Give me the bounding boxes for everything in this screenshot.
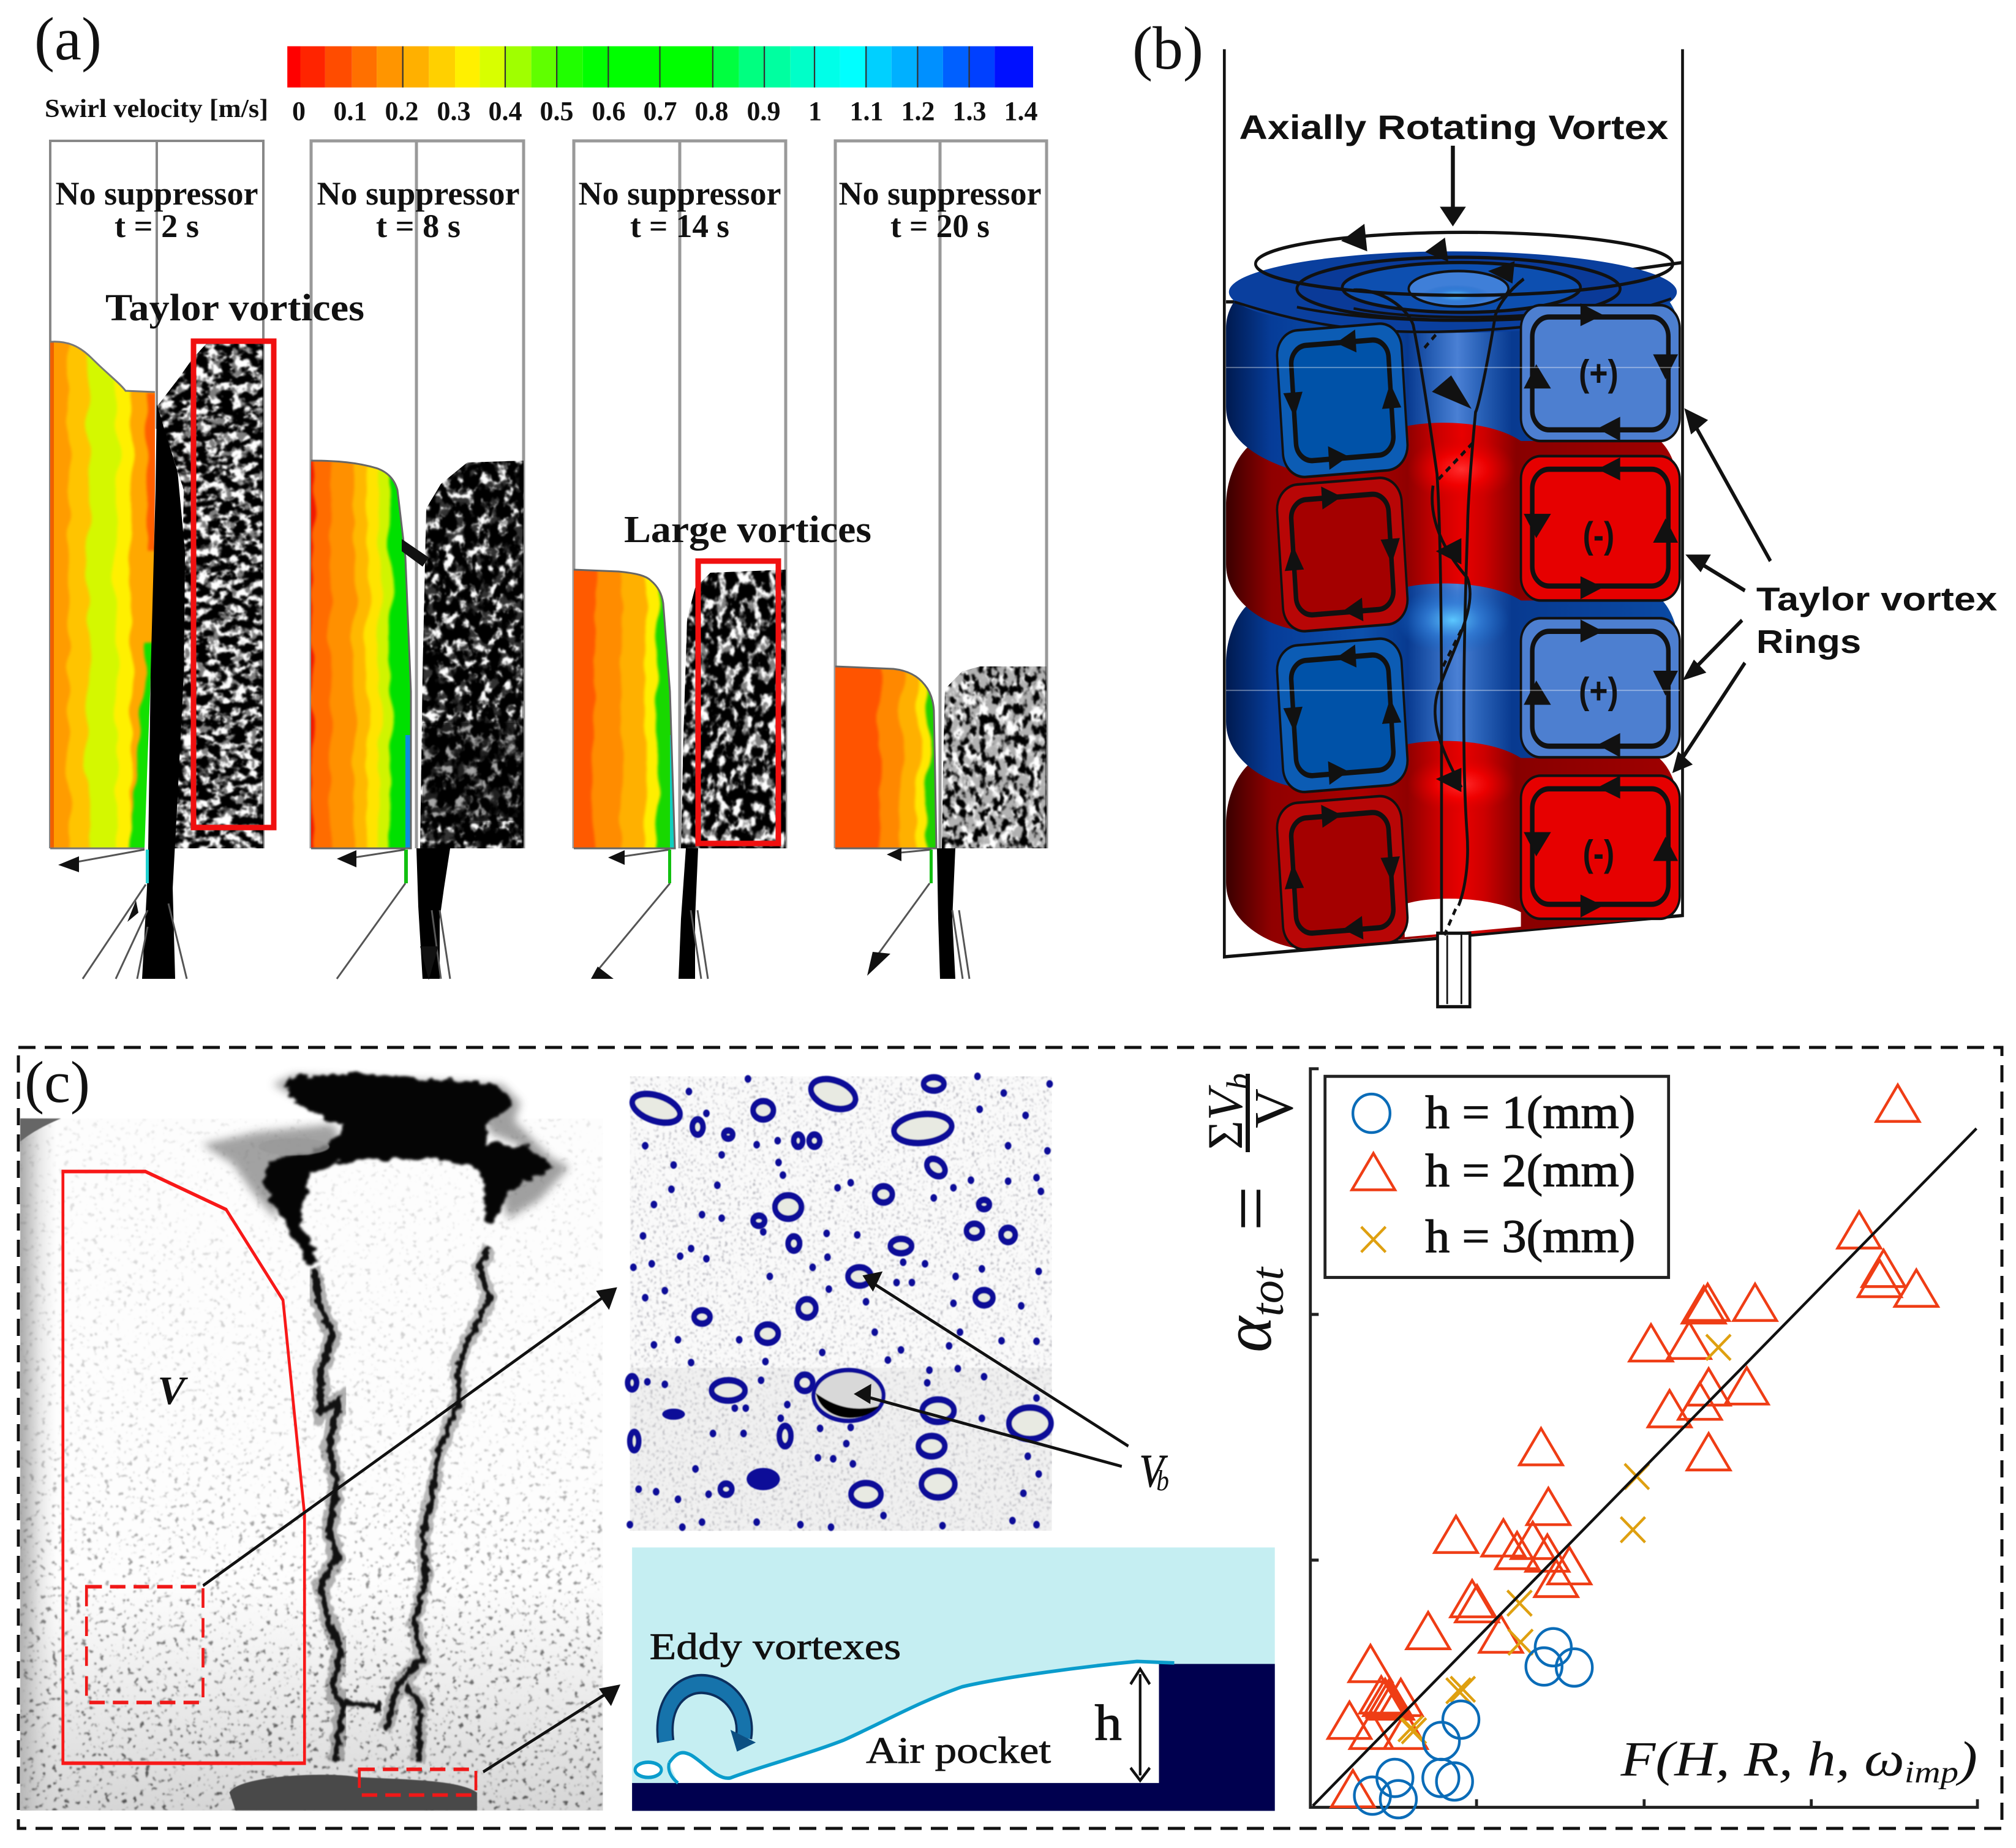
torus highlights	[1396, 436, 1515, 814]
caption: t = 2 s: No suppressor	[55, 175, 258, 212]
arrow to schematic	[483, 1684, 620, 1772]
y-axis formula	[1197, 1073, 1304, 1352]
core jet and arrows 20 s	[867, 848, 969, 979]
label: Air pocket: Air pocket	[866, 1730, 1051, 1771]
legend text: h = 1(mm)	[1425, 1087, 1635, 1139]
small bubbles	[630, 1076, 1050, 1527]
x-axis label: imp	[1905, 1754, 1958, 1789]
label: bubble volume V_b: V	[1139, 1446, 1168, 1497]
caption: t = 14 s: t = 14 s	[630, 208, 729, 244]
plot axes	[1311, 1069, 1977, 1808]
label: Taylor vortex Rings	[1756, 581, 1998, 660]
cross-section: left blue upper	[1276, 322, 1409, 478]
cross-section: left red upper	[1276, 476, 1409, 633]
torus: lower red	[1226, 733, 1680, 948]
photo overlays	[63, 1172, 620, 1811]
core jet and arrows 8 s	[337, 539, 450, 980]
vector field 8 s	[416, 459, 527, 851]
corner shadow	[20, 1118, 61, 1142]
air pocket region	[669, 1661, 1161, 1783]
contour outline 14 s	[574, 570, 675, 848]
base hole and outlet pipe	[1405, 899, 1521, 1007]
legend box	[1325, 1076, 1669, 1278]
colorbar	[287, 46, 1033, 88]
x-axis label: )	[1955, 1732, 1977, 1787]
panel c: dashed frame	[18, 1047, 2002, 1828]
legend marker cross	[1361, 1227, 1386, 1252]
cell signs: (-)	[1583, 515, 1614, 556]
caption: t = 8 s	[317, 175, 519, 244]
contour outline 8 s	[311, 461, 411, 848]
colorbar tick labels: 1.2	[901, 96, 935, 126]
colorbar tick labels: 0.9	[747, 96, 780, 126]
contour 14 s	[574, 571, 674, 848]
colorbar tick labels: 0.7	[643, 96, 677, 126]
colorbar tick labels: 0	[292, 96, 306, 126]
free surface line	[669, 1661, 1174, 1783]
cell signs: (+)	[1579, 352, 1619, 394]
panel label b: (b)	[1132, 14, 1203, 82]
label: Taylor vortex Rings: Taylor vortex	[1756, 581, 1998, 617]
vortex right edge	[343, 1247, 489, 1762]
y-axis formula: =	[1209, 1186, 1293, 1231]
frame: time step 20 s	[835, 141, 1047, 848]
colorbar tick labels: 0.3	[437, 96, 470, 126]
legend text: h = 3(mm)	[1425, 1211, 1635, 1262]
vortex base pool	[230, 1774, 477, 1811]
series h = 3 crosses	[1398, 1335, 1731, 1743]
vortex top surface	[202, 1074, 570, 1262]
cross-section: right blue upper	[1521, 303, 1680, 441]
cross-section: right red upper	[1521, 456, 1680, 600]
caption: t = 8 s: t = 8 s	[376, 208, 461, 244]
label: bubble volume V_b: b	[1156, 1464, 1169, 1497]
caption: t = 8 s: No suppressor	[317, 175, 519, 212]
legend text	[1425, 1087, 1635, 1262]
cell signs	[1579, 352, 1619, 874]
panel label c: (c)	[24, 1049, 90, 1115]
y-axis formula: ΣV	[1197, 1090, 1253, 1150]
label: Axially Rotating Vortex: Axially Rotating Vortex	[1239, 109, 1668, 147]
measurement volume outline	[63, 1172, 304, 1763]
y-axis formula: α	[1210, 1316, 1286, 1352]
torus: upper red	[1226, 415, 1680, 630]
large dark bubble	[662, 1370, 884, 1490]
y-axis formula: b	[1220, 1073, 1257, 1090]
vector field 14 s	[680, 568, 790, 850]
faint scan lines	[1226, 368, 1680, 690]
caption: t = 14 s	[578, 175, 781, 244]
caption: t = 14 s: No suppressor	[578, 175, 781, 212]
bubble rings	[628, 1074, 1051, 1506]
vortex left edge	[313, 1268, 343, 1762]
caption: t = 20 s: t = 20 s	[890, 208, 990, 244]
base and step	[632, 1664, 1275, 1811]
cross-section: left red lower	[1276, 794, 1409, 951]
colorbar tick labels: 0.8	[694, 96, 729, 126]
cell signs: (-)	[1583, 833, 1614, 874]
volume label V: V	[157, 1368, 189, 1413]
eddy rotation arrow	[665, 1684, 756, 1752]
cross-section: right blue lower	[1521, 618, 1680, 757]
dashed zoom box: bubbles	[86, 1586, 203, 1702]
contour 20 s	[835, 668, 936, 848]
colorbar tick labels: 0.2	[385, 96, 419, 126]
contour outline 20 s	[835, 666, 936, 848]
legend text: h = 2(mm)	[1425, 1145, 1635, 1197]
colorbar tick labels: 1.4	[1004, 96, 1037, 126]
label: Taylor vortex Rings: Rings	[1756, 624, 1861, 660]
colorbar tick labels: 0.6	[592, 96, 626, 126]
contour 2 s	[50, 342, 155, 848]
colorbar tick labels: 0.1	[333, 96, 367, 126]
label: Eddy vortexes: Eddy vortexes	[650, 1626, 901, 1667]
colorbar tick labels: 1.3	[953, 96, 986, 126]
double arrow: h	[1130, 1669, 1150, 1781]
colorbar tick labels: 1	[808, 96, 822, 126]
detached air bubble	[635, 1762, 661, 1778]
annotation: Large vortices: Large vortices	[624, 509, 871, 551]
arrow to axial vortex	[1440, 146, 1466, 227]
image: bubble close-up	[628, 1074, 1169, 1531]
series h = 2 triangles	[1328, 1085, 1938, 1807]
colorbar tick labels: 1.1	[850, 96, 883, 126]
caption: t = 20 s	[839, 175, 1041, 244]
series h = 1 circles	[1355, 1629, 1592, 1818]
panel a: swirl velocity simulation	[34, 5, 1050, 980]
axial vortex strands	[1353, 279, 1524, 935]
contour outline 2 s	[50, 342, 155, 848]
frame: time step 2 s	[50, 141, 263, 848]
highlight box: Taylor vortices	[194, 341, 274, 828]
y-axis formula: V	[1244, 1088, 1304, 1128]
arrows to vortex rings	[1672, 408, 1770, 773]
highlight box: large vortices	[698, 561, 778, 843]
photo: experiment background	[20, 1118, 603, 1811]
frame: time step 8 s	[311, 141, 524, 848]
core jet and arrows 2 s	[58, 404, 187, 979]
label: h: h	[1095, 1695, 1122, 1751]
colorbar tick labels	[292, 96, 1037, 126]
frame: time step 14 s	[574, 141, 786, 848]
vector field 2 s	[153, 340, 266, 851]
dashed zoom box: air pocket	[359, 1770, 476, 1795]
x-axis label: F(H, R, h, ω	[1620, 1732, 1859, 1787]
caption: t = 2 s: t = 2 s	[115, 208, 199, 244]
annotation: Taylor vortices: Taylor vortices	[105, 287, 364, 329]
legend marker triangle	[1352, 1153, 1395, 1190]
pointer lines to bubbles	[854, 1272, 1129, 1466]
top surface ellipses	[1229, 224, 1677, 333]
cylinder walls	[1224, 49, 1682, 957]
schematic: air pocket	[632, 1547, 1275, 1811]
vector field 20 s	[940, 665, 1050, 851]
cross-section: left blue lower	[1276, 637, 1409, 794]
cross-section: right red lower	[1521, 775, 1680, 919]
fit line	[1313, 1128, 1976, 1806]
scatter plot	[1311, 1069, 1977, 1818]
core jet and arrows 14 s	[591, 848, 708, 979]
arrow to bubble image	[203, 1288, 617, 1586]
panel b: Taylor vortex rings diagram	[1224, 49, 1998, 1007]
panel label a: (a)	[34, 5, 102, 73]
colorbar tick labels: 0.4	[489, 96, 522, 126]
torus: lower blue	[1226, 572, 1680, 788]
caption: t = 2 s	[55, 175, 258, 244]
colorbar title: Swirl velocity [m/s]	[45, 95, 268, 123]
caption: t = 20 s: No suppressor	[839, 175, 1041, 212]
contour 8 s	[311, 462, 410, 848]
y-axis formula: tot	[1242, 1266, 1293, 1316]
legend marker circle	[1353, 1094, 1390, 1133]
cell signs: (+)	[1579, 670, 1619, 711]
colorbar tick labels: 0.5	[540, 96, 573, 126]
torus: top blue	[1226, 269, 1680, 471]
